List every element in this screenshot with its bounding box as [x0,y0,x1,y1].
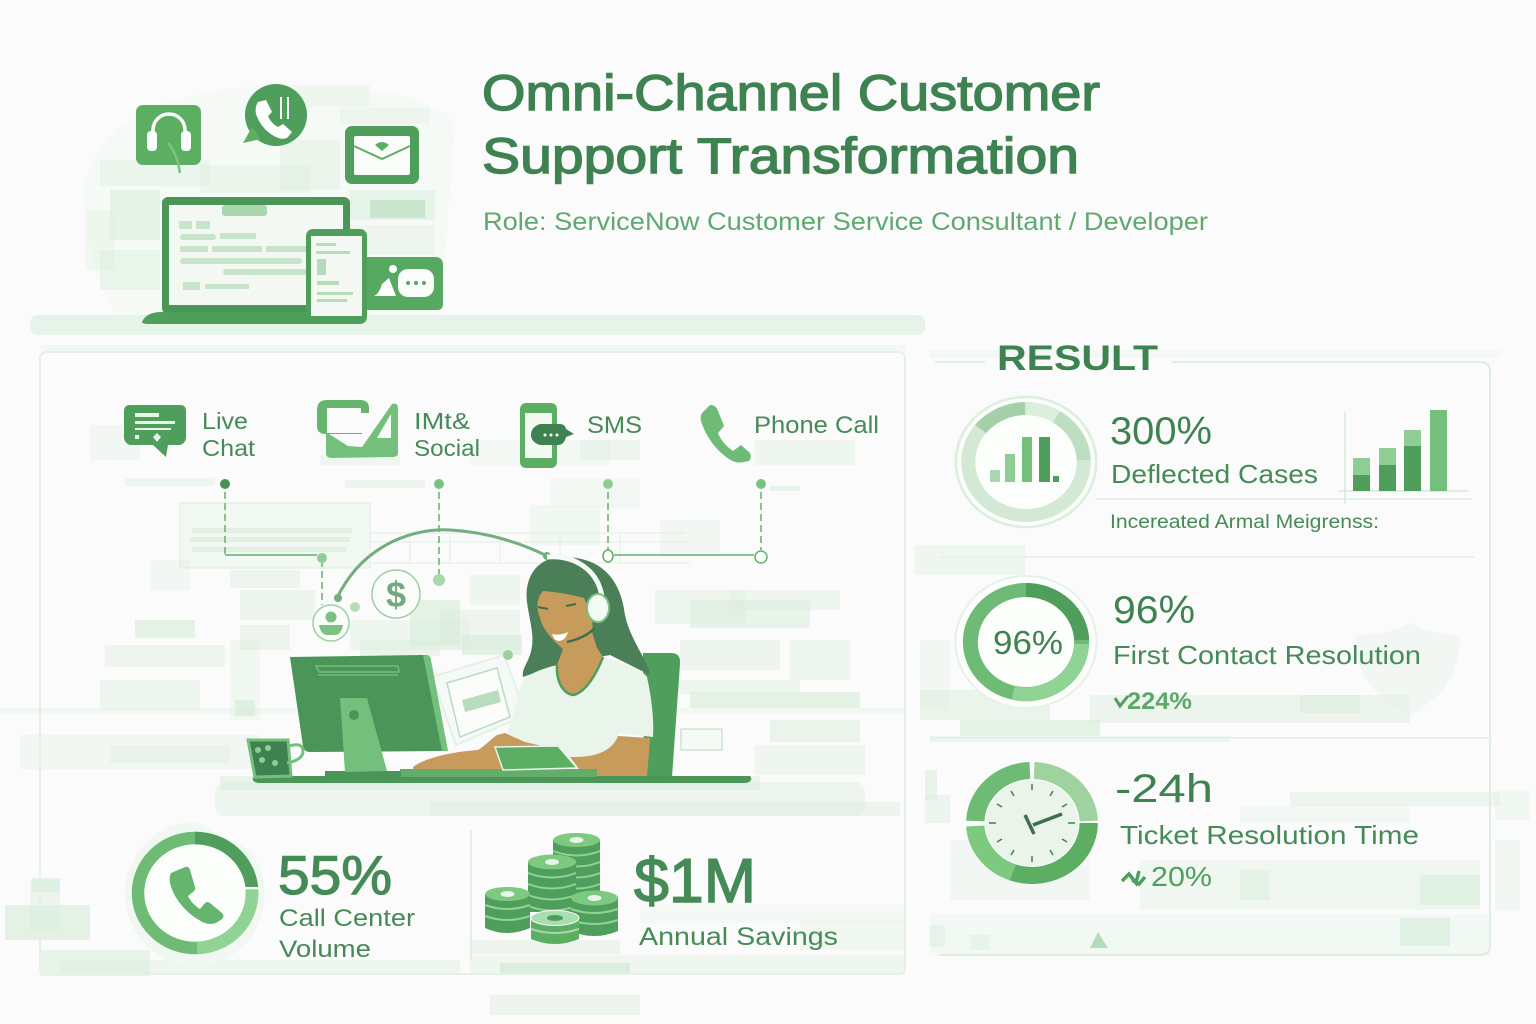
stat: call center volume [125,822,415,966]
bottom band left panel [430,802,900,816]
stat: annual savings [485,833,838,951]
channel: live chat [124,405,256,461]
channel: IM and social [317,400,480,461]
hair [523,557,650,677]
shirt [507,657,653,757]
icon: chat card [367,257,443,310]
stat: call center volume: Call Center [279,905,415,932]
title: Support Transformation [482,128,1079,184]
icon: headset [136,105,201,173]
channel: live chat: Live [202,408,248,434]
mid band behind agent [135,620,195,638]
channel: phone call: Phone Call [754,412,879,439]
metric: deflected cases: Deflected Cases [1111,459,1318,489]
clock icon [975,770,1089,875]
metric: deflected cases [956,397,1472,533]
arc connecting customer to agent [334,530,551,602]
metric: ticket resolution time: -24h [1115,767,1213,811]
desk [253,776,751,783]
change indicator [1122,861,1212,892]
panel: result [930,339,1490,955]
change indicator: 20% [1151,861,1212,892]
right panel [915,545,1025,575]
stat: call center volume: 55% [278,844,392,906]
donut chart [955,576,1097,708]
metric: first contact resolution: First Contact Resolution [1113,640,1421,670]
icon: dollar coin: $ [386,574,406,615]
channel: live chat: Chat [202,435,256,461]
face and neck [537,591,603,695]
icon: envelope [345,126,419,184]
subtitle: role: Role: ServiceNow Customer Service Consultant / Developer [483,208,1208,236]
monitor [290,655,448,772]
icon: laptop [142,197,350,324]
metric: deflected cases: Incereated Armal Meigrenss: [1110,512,1379,533]
metric: ticket resolution time [975,767,1419,892]
icon: customer badge [313,605,349,641]
title: Omni-Channel Customer [482,65,1100,121]
channel: IM and social: IMt& [414,408,470,434]
agent illustration [248,557,751,783]
channel: SMS: SMS [587,412,642,439]
change indicator: 224% [1127,688,1192,715]
side chip [681,729,722,750]
keyboard tablet [495,746,577,770]
arms [413,733,570,770]
heading: result: RESULT [997,339,1158,378]
connector lines [220,479,767,612]
metric: first contact resolution: 96% [1113,589,1195,632]
metric: first contact resolution [955,576,1421,715]
panel: channels and agent [40,352,905,974]
stat: annual savings: Annual Savings [639,923,838,951]
stat: call center volume: Volume [279,936,371,963]
hero illustration: devices and channel icons [136,84,443,324]
chair [643,653,680,777]
bar chart [1338,410,1468,504]
coffee mug [248,740,303,777]
icon: coin stacks [485,833,618,944]
icon: phone bubble [243,84,307,146]
title [482,65,1100,184]
channel: SMS [520,403,642,468]
upper-left band and table [90,425,140,460]
channel: phone call [701,405,879,463]
donut chart [956,397,1096,527]
metric: ticket resolution time: Ticket Resolution Time [1120,820,1419,850]
metric: deflected cases: 300% [1110,410,1212,453]
icon: tablet [306,229,367,324]
icon: dollar coin [372,570,420,618]
stat: annual savings: $1M [634,847,756,916]
headset [547,557,609,642]
floating document [432,650,526,745]
channel: IM and social: Social [414,435,480,461]
donut chart: 96% [993,624,1063,661]
